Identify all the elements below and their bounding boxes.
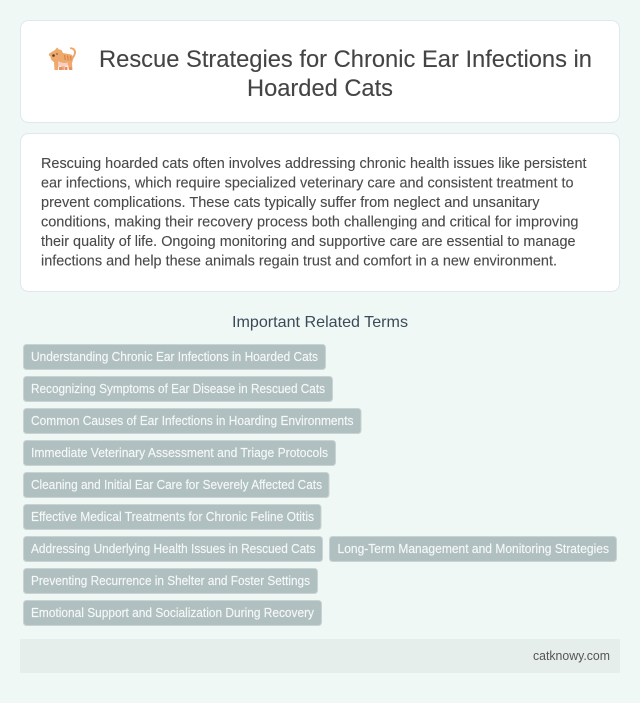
panel: summary text: their quality of life. Ongoing monitoring and supportive care are essential to manage <box>41 233 576 250</box>
footer: catknowy.com <box>533 649 610 663</box>
tag 3 <box>24 408 361 434</box>
icon: cat <box>49 47 76 70</box>
tag 4 <box>24 440 336 466</box>
title <box>99 46 592 102</box>
panel: related term tags <box>24 344 616 626</box>
title: Hoarded Cats <box>247 75 393 102</box>
tag 1: Understanding Chronic Ear Infections in Hoarded Cats <box>31 350 318 364</box>
tag 4: Immediate Veterinary Assessment and Triage Protocols <box>31 446 328 460</box>
tag 2: Recognizing Symptoms of Ear Disease in Rescued Cats <box>31 382 325 396</box>
tag 10: Emotional Support and Socialization During Recovery <box>31 606 315 620</box>
tag 6: Effective Medical Treatments for Chronic Feline Otitis <box>31 510 314 524</box>
tag 2 <box>24 376 332 402</box>
footer <box>20 639 620 673</box>
panel: summary text: prevent complications. These cats typically suffer from neglect and unsanitary <box>41 194 540 211</box>
panel: summary text: infections and help these animals regain trust and comfort in a new environment. <box>41 252 557 270</box>
panel: summary text: conditions, making their recovery process both challenging and critical for improving <box>41 214 578 230</box>
tag 5 <box>24 472 329 498</box>
tag 10 <box>24 600 322 626</box>
tag 9 <box>24 568 318 594</box>
tag 6 <box>24 504 321 530</box>
tag 3: Common Causes of Ear Infections in Hoarding Environments <box>31 414 354 428</box>
tag 7: Addressing Underlying Health Issues in Rescued Cats <box>31 542 316 556</box>
panel: header <box>20 20 620 122</box>
tag 9: Preventing Recurrence in Shelter and Foster Settings <box>31 574 310 588</box>
panel: summary text: Rescuing hoarded cats often involves addressing chronic health issues like persistent <box>41 155 587 172</box>
tag 1 <box>24 344 326 370</box>
tag 8: Long-Term Management and Monitoring Strategies <box>338 542 609 556</box>
panel: summary text <box>20 134 620 292</box>
tag 5: Cleaning and Initial Ear Care for Severely Affected Cats <box>31 478 322 492</box>
tag 8 <box>330 536 616 562</box>
heading: important related terms: Important Related Terms <box>232 314 408 331</box>
tag 7 <box>24 536 322 562</box>
panel: summary text: ear infections, which require specialized veterinary care and consistent treatment to <box>41 174 574 192</box>
title: Rescue Strategies for Chronic Ear Infections in <box>99 46 592 73</box>
